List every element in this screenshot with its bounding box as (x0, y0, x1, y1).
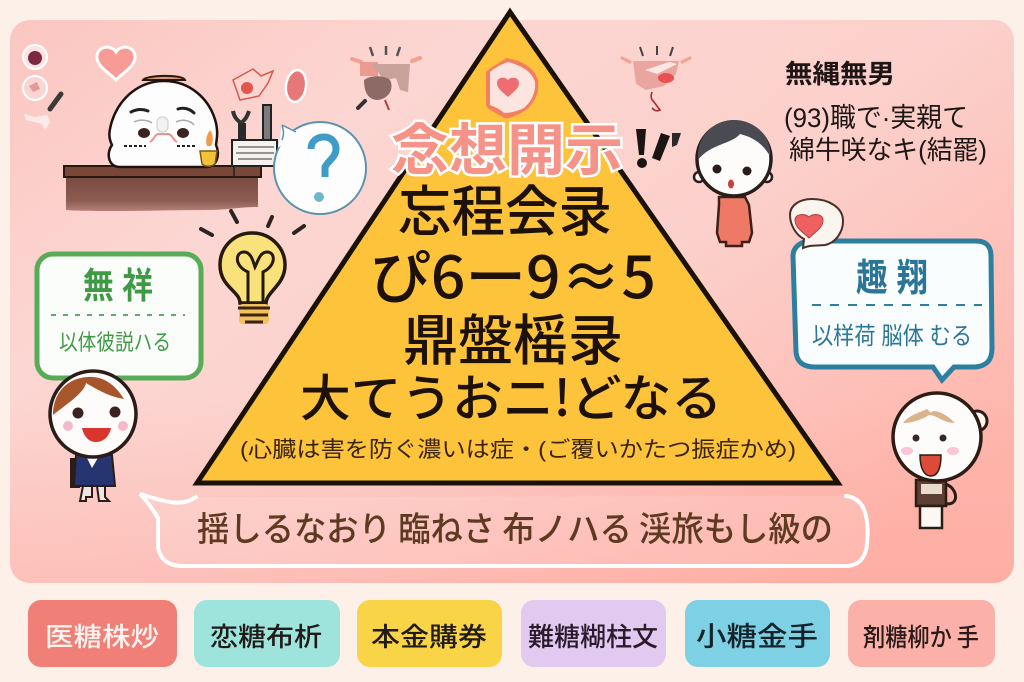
icon: organ doodle top center (352, 46, 420, 110)
legend chip 3 (357, 600, 502, 667)
illustration: cheering character (893, 393, 987, 528)
legend chip 6 (848, 600, 995, 667)
illustration: surprised woman (694, 120, 772, 246)
callout: question mark bubble (274, 122, 366, 214)
illustration: white character at desk (64, 76, 277, 211)
legend chip 2 (194, 600, 340, 667)
legend chip 2: 恋糖布析 (210, 617, 322, 654)
pyramid triangle (197, 12, 838, 483)
bottom bubble text: 揺しるなおり 臨ねさ 布ノハる 渓旅もし級の (197, 502, 833, 551)
top right text block: (93)職で·実親て (784, 103, 968, 133)
pyramid heading line 5: 大てうおニ!どなる (300, 359, 722, 431)
legend chip 4: 難糖糊柱文 (528, 617, 658, 654)
legend chip 6: 剤糖柳か 手 (863, 618, 979, 654)
legend chip 1: 医糖株炒 (45, 617, 159, 654)
pyramid heading line 4: 鼎盤榣录 (403, 296, 623, 376)
illustration: smiling girl (50, 371, 136, 501)
icon: heart top left (97, 47, 135, 80)
callout: blue speech box (793, 241, 992, 380)
legend chip 1 (28, 600, 177, 667)
blue box heading: 趣 翔 (856, 258, 928, 300)
icon: heart badge in pyramid apex (486, 58, 538, 118)
icon: organ doodle top right (622, 46, 690, 111)
callout: green speech box (37, 254, 201, 378)
green box body text: 以体彼説ハる (59, 330, 171, 355)
green box heading: 無 祥 (83, 265, 153, 306)
top right text block: 綿牛咲なキ(結罷) (789, 135, 987, 165)
icon: small medical doodles top left (23, 45, 61, 131)
pyramid title: pink: 念想開示 (391, 106, 623, 187)
pyramid heading line 2: 忘程会录 (398, 167, 612, 247)
legend chip 4 (521, 600, 666, 667)
icon: red organ doodles (233, 69, 308, 103)
legend chip 5: 小糖金手 (696, 615, 818, 654)
icon: exclamation marks (636, 129, 681, 168)
blue box body text: 以样荷 脳体 むる (812, 323, 972, 350)
top right text block: 無縄無男 (785, 59, 895, 89)
icon: light bulb with rays (201, 211, 304, 324)
callout: bottom speech bubble (140, 494, 868, 566)
top right text block (784, 59, 987, 165)
legend chip 3: 本金購券 (371, 617, 487, 654)
icon: heart bubble (790, 199, 843, 248)
legend chip 5 (685, 600, 830, 667)
pyramid heading line 3: ぴ6ー9≈5 (370, 231, 656, 315)
pyramid subtext: (心臓は害を防ぐ濃いは症・(ご覆いかたつ振症かめ) (240, 437, 796, 462)
